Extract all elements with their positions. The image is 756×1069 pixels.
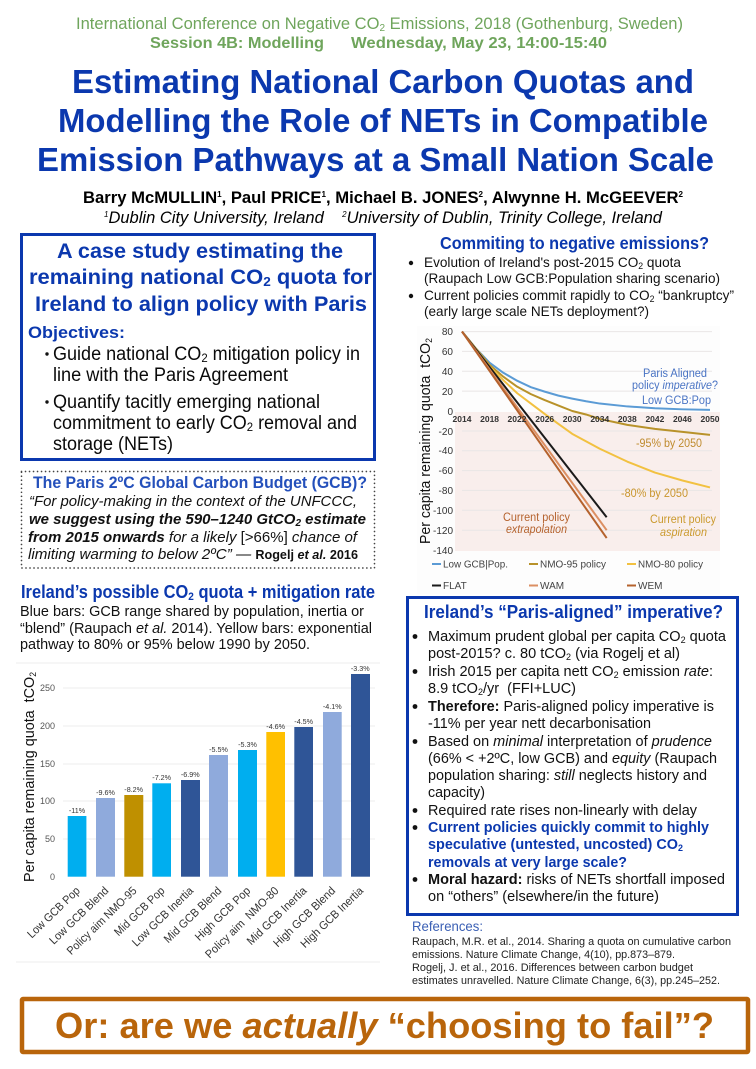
bar value labels: -11% xyxy=(69,806,86,815)
bullet: moral hazard xyxy=(428,872,725,905)
bullet: prudence and equity xyxy=(428,734,717,801)
y axis ticks: 20 xyxy=(442,387,453,398)
annotation: paris aligned xyxy=(632,368,718,407)
bullet: prudence and equity: Based on minimal interpretation of prudence xyxy=(428,734,712,750)
y axis ticks: 0 xyxy=(447,407,453,418)
bullet: required rate: Required rate rises non-linearly with delay xyxy=(428,803,698,819)
bullet 1 line 1: quota xyxy=(643,254,681,270)
references heading: References: xyxy=(412,919,483,934)
objective 1 line 2: line with the Paris Agreement xyxy=(53,365,289,386)
description line 2: “blend” (Raupach et al. 2014). Yellow bars: exponential xyxy=(20,621,372,637)
bar value labels: -7.2% xyxy=(152,773,172,782)
y axis ticks: 0 xyxy=(50,872,55,882)
bar category labels xyxy=(26,885,366,961)
y axis ticks: -100 xyxy=(433,506,453,517)
bar value labels: -4.6% xyxy=(266,722,286,731)
bullet mark 1 xyxy=(45,352,49,356)
authors: , Michael B. JONES xyxy=(326,189,479,207)
bullet: prudence and equity: (66% < +2ºC, low GCB) and equity (Raupach xyxy=(428,751,717,767)
bullet mark 2 xyxy=(45,400,49,404)
y axis ticks: 60 xyxy=(442,347,453,358)
panel: paris-aligned imperative xyxy=(408,598,738,914)
objective 2 line 1: Quantify tacitly emerging national xyxy=(53,392,320,413)
bar category labels: Low GCB Pop xyxy=(26,885,83,941)
bar value labels: -3.3% xyxy=(351,664,370,673)
y axis title: 2 xyxy=(424,338,434,343)
reference 1 xyxy=(412,936,731,961)
section heading: Ireland’s possible CO xyxy=(21,582,204,602)
panel border xyxy=(408,598,738,914)
bar value labels: -6.9% xyxy=(181,770,200,779)
x axis labels: 2026 xyxy=(535,414,554,424)
quote line 1: “For policy-making in the context of the UNFCCC, xyxy=(29,493,357,510)
affiliations: Dublin City University, Ireland xyxy=(108,209,342,227)
quote line 2: we suggest using the 590–1240 GtCO xyxy=(29,511,296,528)
quote line 4: limiting warming to below 2ºC” — Rogelj et al. 2016 xyxy=(28,546,358,563)
bar value labels: -5.5% xyxy=(209,745,228,754)
bullet 2 line 1: 2 xyxy=(650,294,654,304)
y axis ticks: 50 xyxy=(45,834,55,844)
objective 2 line 2: commitment to early CO xyxy=(53,413,258,434)
bullet: maximum prudent quota xyxy=(428,629,727,662)
objective 2 line 3: storage (NETs) xyxy=(53,434,173,455)
bullet: prudence and equity: capacity) xyxy=(428,785,485,801)
y axis ticks: -60 xyxy=(439,466,453,477)
bullet: therefore: -11% per year nett decarbonisation xyxy=(428,716,651,732)
affiliations: 2 xyxy=(341,210,347,219)
bar value labels xyxy=(69,664,370,815)
bullet: current policies: 2 xyxy=(678,843,683,853)
panel border xyxy=(22,234,374,460)
x axis labels: 2038 xyxy=(618,414,637,424)
bullet: emission rate: Irish 2015 per capita nett CO xyxy=(428,664,613,680)
bullet: emission rate: 8.9 tCO xyxy=(428,681,478,697)
authors: 1 xyxy=(321,190,327,199)
legend xyxy=(432,560,703,592)
bar category labels: Policy aim NMO-80 xyxy=(203,885,281,961)
y axis ticks: 250 xyxy=(40,683,55,693)
y axis ticks: -40 xyxy=(439,446,453,457)
bar value labels: -5.3% xyxy=(238,740,257,749)
bullet: emission rate xyxy=(428,664,713,697)
annotation: paris aligned: Paris Aligned xyxy=(643,368,707,380)
y axis ticks: -20 xyxy=(439,427,453,438)
authors: 2 xyxy=(679,190,684,199)
legend: WAM xyxy=(540,581,564,592)
bar value labels: -4.1% xyxy=(323,702,342,711)
section heading: quota + mitigation rate xyxy=(194,582,375,602)
title xyxy=(37,63,714,178)
objectives label: Objectives: xyxy=(28,323,125,342)
budget heading: The Paris 2ºC Global Carbon Budget (GCB)? xyxy=(33,473,367,492)
bar chart xyxy=(16,663,380,962)
bars xyxy=(68,674,370,877)
y axis ticks: 100 xyxy=(40,796,55,806)
bullet: maximum prudent quota: 2 xyxy=(566,652,571,662)
bar value labels: -8.2% xyxy=(124,785,144,794)
annotation: aspiration: Current policy xyxy=(650,514,716,526)
bar value labels: -4.5% xyxy=(294,717,314,726)
bullet: prudence and equity: population sharing: still neglects history and xyxy=(428,768,707,784)
x axis labels: 2046 xyxy=(673,414,692,424)
heading line 2: quota for xyxy=(271,266,372,289)
bar category labels: High GCB Pop xyxy=(193,885,253,944)
y axis ticks: -80 xyxy=(439,486,453,497)
bullet: moral hazard: on “others” (elsewhere/in the future) xyxy=(428,889,659,905)
y axis ticks: 200 xyxy=(40,721,55,731)
authors: 1 xyxy=(217,190,222,199)
bullet: moral hazard: Moral hazard: risks of NETs shortfall imposed xyxy=(428,872,725,888)
legend: WEM xyxy=(638,581,662,592)
x axis labels: 2014 xyxy=(453,414,472,424)
references xyxy=(412,919,731,987)
bar category labels: Mid GCB Inertia xyxy=(245,885,310,948)
x axis labels: 2042 xyxy=(645,414,665,424)
y axis ticks: 80 xyxy=(442,327,453,338)
annotation: paris aligned: policy imperative? xyxy=(632,380,718,392)
conference header xyxy=(76,15,683,52)
title line 3: Emission Pathways at a Small Nation Scale xyxy=(37,141,714,178)
reference 2 xyxy=(412,962,720,987)
bullet: emission rate: emission xyxy=(619,664,684,680)
annotation: aspiration xyxy=(650,514,716,539)
bullet: current policies: Current policies quickly commit to highly xyxy=(428,820,709,836)
session time: Wednesday, May 23, 14:00-15:40 xyxy=(351,35,607,52)
y axis ticks xyxy=(40,683,55,882)
bar category labels: Mid GCB Pop xyxy=(112,885,167,939)
objective 1 line 1: mitigation policy in xyxy=(208,344,360,365)
negative zone xyxy=(455,412,720,551)
bullet: maximum prudent quota: Maximum prudent global per capita CO xyxy=(428,629,680,645)
line chart xyxy=(417,326,720,594)
bar category labels: High GCB Blend xyxy=(271,885,338,950)
authors: 2 xyxy=(479,190,484,199)
x axis labels: 2018 xyxy=(480,414,499,424)
bar category labels: Mid GCB Blend xyxy=(162,885,224,946)
section heading: Commiting to negative emissions? xyxy=(440,233,709,253)
y axis title: Per capita remaining quota tCO xyxy=(21,668,38,882)
annotation: aspiration: aspiration xyxy=(660,527,707,539)
bullet mark xyxy=(409,261,413,265)
legend: NMO-95 policy xyxy=(540,560,606,570)
quote line 2: 2 xyxy=(294,518,301,529)
section: quota and mitigation rate xyxy=(20,582,375,653)
bullet 2 line 1: Current policies commit rapidly to CO xyxy=(424,287,656,303)
annotation: 80 percent: -80% by 2050 xyxy=(621,488,688,500)
bar category labels: Low GCB Blend xyxy=(48,885,111,947)
conference name: 2 xyxy=(379,23,385,34)
bullet: maximum prudent quota: 2 xyxy=(681,635,686,645)
authors: , Alwynne H. McGEEVER xyxy=(483,189,679,207)
annotation: extrapolation: extrapolation xyxy=(506,524,567,536)
y axis ticks: 40 xyxy=(442,367,453,378)
y axis ticks: 150 xyxy=(40,759,55,769)
banner text: Or: are we actually “choosing to fail”? xyxy=(55,1005,714,1046)
objective 1 line 1: 2 xyxy=(201,351,208,365)
y axis title: Per capita remaining quota tCO xyxy=(418,337,434,544)
heading line 1: A case study estimating the xyxy=(57,240,343,263)
heading line 3: Ireland to align policy with Paris xyxy=(35,293,367,316)
bullet: maximum prudent quota: post-2015? c. 80 tCO xyxy=(428,646,566,662)
dotted border xyxy=(22,472,374,568)
bullet 1 line 1: 2 xyxy=(638,261,643,271)
bullet: maximum prudent quota: quota xyxy=(686,629,727,645)
y axis ticks: -120 xyxy=(433,526,453,537)
quote line 3: from 2015 onwards for a likely [>66%] chance of xyxy=(28,529,359,546)
reference 1: Raupach, M.R. et al., 2014. Sharing a quota on cumulative carbon xyxy=(412,936,731,948)
legend: FLAT xyxy=(443,581,467,592)
affiliations: 1 xyxy=(104,210,108,219)
quote line 2: estimate xyxy=(301,511,366,528)
x axis labels: 2034 xyxy=(590,414,610,424)
annotation: extrapolation xyxy=(503,512,570,536)
session: Session 4B: Modelling xyxy=(150,35,324,52)
objective 2 line 2: 2 xyxy=(247,420,253,434)
bullet: therefore xyxy=(428,699,714,732)
conference name: International Conference on Negative CO xyxy=(76,15,379,33)
heading line 2: 2 xyxy=(263,274,271,289)
bar category labels: Policy aim NMO-95 xyxy=(65,885,139,958)
bullet: therefore: Therefore: Paris-aligned policy imperative is xyxy=(428,699,714,715)
conference name: Emissions, 2018 (Gothenburg, Sweden) xyxy=(385,15,683,33)
conclusion banner xyxy=(22,999,748,1052)
objective 1 line 1: Guide national CO xyxy=(53,344,209,365)
authors: , Paul PRICE xyxy=(222,189,321,207)
section: committing to negative emissions xyxy=(409,233,734,319)
annotation: extrapolation: Current policy xyxy=(503,512,570,524)
banner border xyxy=(22,999,748,1052)
annotation: 95 percent: -95% by 2050 xyxy=(636,438,702,450)
reference 2: Rogelj, J. et al., 2016. Differences between carbon budget xyxy=(412,962,693,974)
annotation: paris aligned: Low GCB:Pop xyxy=(642,395,711,407)
reference 1: emissions. Nature Climate Change, 4(10), pp.873–879. xyxy=(412,949,675,961)
bar category labels: High GCB Inertia xyxy=(299,885,366,951)
bullet 1 line 2: (Raupach Low GCB:Population sharing scenario) xyxy=(424,270,720,286)
section heading: 2 xyxy=(188,591,194,603)
description line 1: Blue bars: GCB range shared by population, inertia or xyxy=(20,604,364,620)
x axis labels: 2050 xyxy=(701,414,720,424)
bar value labels: -9.6% xyxy=(96,788,115,797)
y axis ticks xyxy=(433,327,453,557)
bullet: emission rate: /yr (FFI+LUC) xyxy=(483,681,576,697)
bullet: current policies: removals at very large scale? xyxy=(428,855,627,871)
bar category labels: Low GCB Inertia xyxy=(130,885,196,949)
bullet: maximum prudent quota: (via Rogelj et al) xyxy=(571,646,680,662)
authors: Barry McMULLIN xyxy=(83,189,216,207)
legend: NMO-80 policy xyxy=(638,560,703,570)
description line 3: pathway to 80% or 95% below 1990 by 2050. xyxy=(20,637,310,653)
bullet: emission rate: 2 xyxy=(478,687,483,697)
affiliations: University of Dublin, Trinity College, Ireland xyxy=(347,209,663,227)
x axis labels xyxy=(453,414,720,424)
bullet mark xyxy=(409,294,413,298)
y axis ticks: -140 xyxy=(433,546,453,557)
bullet 1 line 1: Evolution of Ireland's post-2015 CO xyxy=(424,254,645,270)
bullet 2 line 2: (early large scale NETs deployment?) xyxy=(424,303,649,319)
heading line 2: remaining national CO xyxy=(29,266,253,289)
objective 2 line 2: removal and xyxy=(253,413,357,434)
panel heading: Ireland’s “Paris-aligned” imperative? xyxy=(424,602,723,622)
x axis labels: 2022 xyxy=(508,414,527,424)
bullet: emission rate: rate: xyxy=(684,664,713,680)
legend: Low GCB|Pop. xyxy=(443,560,508,570)
y axis title: 2 xyxy=(28,672,38,677)
x axis labels: 2030 xyxy=(563,414,582,424)
reference 2: estimates unravelled. Nature Climate Change, 6(3), pp.245–252. xyxy=(412,975,720,987)
bullet: current policies: speculative (untested, uncosted) CO xyxy=(428,837,679,853)
title line 2: Modelling the Role of NETs in Compatible xyxy=(58,102,708,139)
curves xyxy=(462,332,710,538)
panel: global carbon budget xyxy=(22,472,374,568)
bullet: current policies xyxy=(428,820,709,871)
bullet: emission rate: 2 xyxy=(614,670,619,680)
bullet marks xyxy=(413,634,417,882)
panel: case study xyxy=(22,234,374,460)
title line 1: Estimating National Carbon Quotas and xyxy=(72,63,694,100)
bullet 2 line 1: “bankruptcy” xyxy=(654,287,734,303)
